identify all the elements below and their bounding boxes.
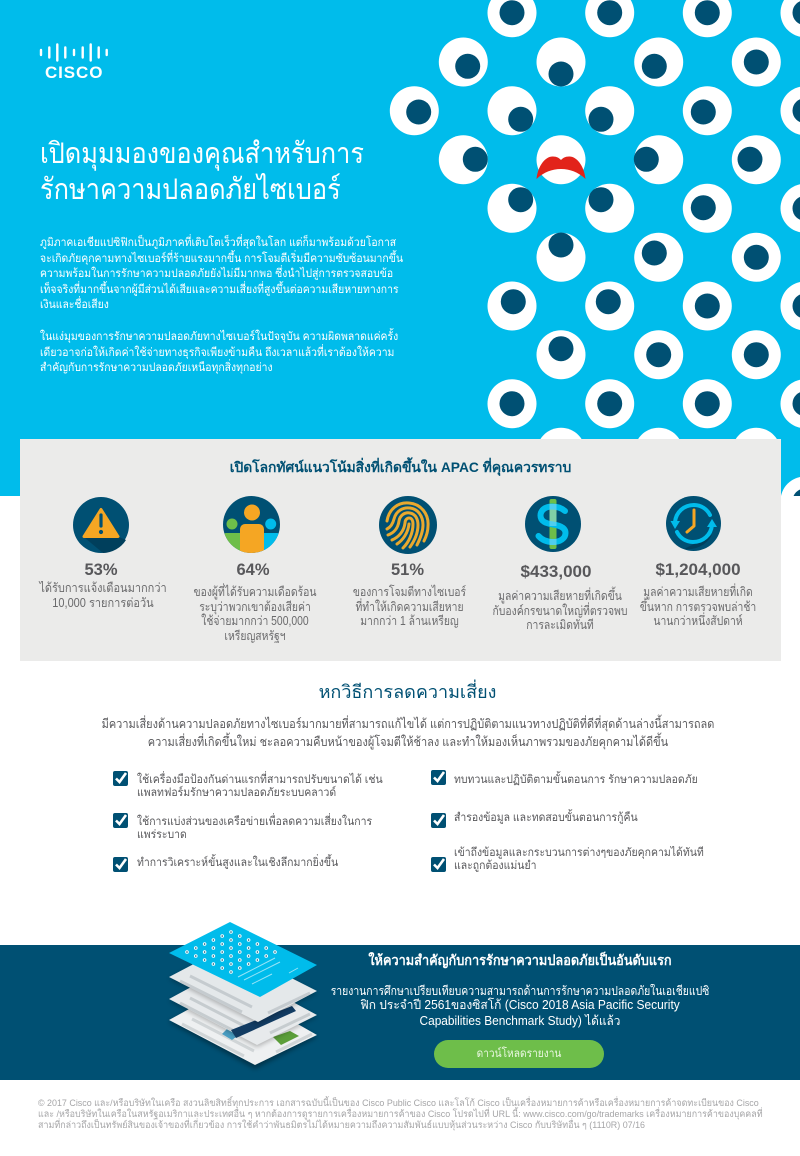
stat: $433,000: $433,000 (521, 562, 591, 581)
stat: 64%: เหรียญสหรัฐฯ (224, 628, 286, 642)
item 2: ใช้การแบ่งส่วนของเครือข่ายเพื่อลดความเสี่ยงในการ (137, 816, 372, 828)
logo: Cisco (40, 43, 108, 82)
title: รักษาความปลอดภัยไซเบอร์ (40, 174, 341, 206)
stat: 64%: ระบุว่าพวกเขาต้องเสียค่า (199, 600, 311, 614)
footer legal text: สามที่กล่าวถึงเป็นทรัพย์สินของเจ้าของที่เกี่ยวข้อง การใช้คำว่าพันธมิตรไม่ได้หมายความถึงความสัมพันธ์แบบหุ้นส่วนระหว่าง Cisco กับบริษัทอื่น ๆ (1110R) 07/16 (38, 1120, 645, 1131)
intro text paragraph 2 (40, 328, 398, 374)
stat: $1,204,000 (640, 560, 756, 628)
stat: 53%: 10,000 รายการต่อวัน (52, 596, 154, 610)
intro text paragraph 2: ในแง่มุมของการรักษาความปลอดภัยทางไซเบอร์ในปัจจุบัน ความผิดพลาดแค่ครั้ง (40, 331, 398, 343)
risk reduction intro: มีความเสี่ยงด้านความปลอดภัยทางไซเบอร์มากมายที่สามารถแก้ไขได้ แต่การปฏิบัติตามแนวทางปฏิบัติที่ดีที่สุดด้านล่างนี้สามารถลด (101, 717, 714, 731)
banner heading: ให้ความสำคัญกับการรักษาความปลอดภัยเป็นอันดับแรก (368, 952, 672, 968)
item 1: ใช้เครื่องมือป้องกันด่านแรกที่สามารถปรับขนาดได้ เช่น (137, 774, 383, 786)
stat: 51%: ที่ทำให้เกิดความเสียหาย (355, 600, 464, 614)
item 5 (431, 809, 638, 828)
intro text paragraph 2: เดียวอาจก่อให้เกิดค่าใช้จ่ายทางธุรกิจเพียงข้ามคืน ถึงเวลาแล้วที่เราต้องให้ความ (40, 347, 394, 359)
footer legal text (38, 1096, 763, 1131)
item 3: ทำการวิเคราะห์ขั้นสูงและในเชิงลึกมากยิ่งขึ้น (137, 857, 338, 869)
logo: Cisco: CISCO (45, 63, 103, 82)
stat: 53%: 53% (84, 561, 118, 579)
icon: fingerprint (379, 496, 437, 554)
blue hero background with eyes pattern (0, 0, 800, 496)
stat: 64% (193, 561, 316, 643)
title: เปิดมุมมองของคุณสำหรับการ (40, 138, 364, 170)
title (40, 138, 364, 206)
stat: 53% (38, 561, 167, 610)
intro text paragraph 1 (40, 234, 403, 311)
banner: download report (0, 945, 800, 1080)
icon: warning (73, 497, 129, 553)
icon: clock with arrows (666, 496, 721, 551)
stat: $433,000: มูลค่าความเสียหายที่เกิดขึ้น (498, 589, 622, 603)
intro text paragraph 1: ความพร้อมในการรักษาความปลอดภัยยังไม่มีมากพอ ซึ่งนำไปสู่การตรวจสอบข้อ (40, 268, 393, 280)
stat: 53%: ได้รับการแจ้งเตือนมากกว่า (39, 581, 167, 595)
button: download: ดาวน์โหลดรายงาน (477, 1048, 561, 1060)
icon: people (223, 496, 280, 553)
intro text paragraph 1: เท็จจริงที่มากขึ้นจากผู้มีส่วนได้เสียและความเสี่ยงที่สูงขึ้นต่อความเสียหายทางการ (40, 284, 399, 296)
icon: dollar (525, 496, 581, 552)
risk reduction intro (101, 714, 714, 750)
item 6 (431, 846, 704, 872)
checkbox list (113, 770, 704, 872)
banner text (331, 984, 709, 1028)
button: download (434, 1040, 604, 1068)
stat: $1,204,000: มูลค่าความเสียหายที่เกิด (643, 585, 753, 599)
item 2 (113, 813, 372, 840)
intro text paragraph 2: สำคัญกับการรักษาความปลอดภัยเหนือทุกสิ่งทุกอย่าง (40, 362, 273, 374)
item 1 (113, 771, 383, 798)
stat: $433,000: กับองค์กรขนาดใหญ่ที่ตรวจพบ (493, 604, 627, 618)
banner text: Capabilities Benchmark Study) ได้แล้ว (420, 1014, 620, 1028)
item 6: และถูกต้องแม่นยำ (454, 860, 536, 872)
stat: $1,204,000: นานกว่าหนึ่งสัปดาห์ (653, 614, 743, 628)
item 4 (431, 770, 698, 786)
stat: $1,204,000: $1,204,000 (655, 560, 741, 579)
stat: 51%: 51% (391, 561, 424, 579)
stat: $433,000 (493, 562, 627, 632)
stat: 64%: ใช้จ่ายมากกว่า 500,000 (201, 614, 309, 628)
stat: 51%: ของการโจมตีทางไซเบอร์ (353, 585, 466, 599)
item 1: แพลทฟอร์มรักษาความปลอดภัยระบบคลาวด์ (137, 786, 336, 798)
intro text paragraph 1: เงินและชื่อเสียง (40, 299, 109, 311)
banner text: รายงานการศึกษาเปรียบเทียบความสามารถด้านการรักษาความปลอดภัยในเอเชียแปซิ (331, 984, 709, 998)
stat: 51%: มากกว่า 1 ล้านเหรียญ (360, 614, 459, 628)
stat: 64%: 64% (236, 561, 270, 579)
risk reduction intro: ความเสี่ยงที่เกิดขึ้นใหม่ ชะลอความคืบหน้าของผู้โจมตีให้ช้าลง และทำให้มองเห็นภาพรวมของภัยคุกคามได้ดีขึ้น (147, 735, 668, 749)
panel: APAC stats (20, 439, 781, 661)
footer legal text: © 2017 Cisco และ/หรือบริษัทในเครือ สงวนลิขสิทธิ์ทุกประการ เอกสารฉบับนี้เป็นของ Cisco Public Cisco และโลโก้ Cisco เป็นเครื่องหมายการค้าหรือเครื่องหมายการค้าจดทะเบียนของ Cisco (38, 1098, 759, 1109)
illustration: report page stack (169, 922, 317, 1070)
banner text: ฟิก ประจำปี 2561ของซิสโก้ (Cisco 2018 Asia Pacific Security (360, 998, 680, 1012)
intro text paragraph 1: ภูมิภาคเอเชียแปซิฟิกเป็นภูมิภาคที่เติบโตเร็วที่สุดในโลก แต่ก็มาพร้อมด้วยโอกาส (40, 237, 396, 249)
item 3 (113, 854, 338, 872)
footer legal text: และ /หรือบริษัทในเครือในสหรัฐอเมริกาและประเทศอื่น ๆ หากต้องการดูรายการเครื่องหมายการค้าของ Cisco โปรดไปที่ URL นี้: www.cisco.com/go/trademarks เครื่องหมายการค้าของบุคคลที่ (38, 1109, 763, 1120)
item 6: เข้าถึงข้อมูลและกระบวนการต่างๆของภัยคุกคามได้ทันที (454, 847, 704, 859)
stat: 51% (353, 561, 466, 628)
item 5: สำรองข้อมูล และทดสอบขั้นตอนการกู้คืน (454, 812, 638, 824)
panel heading: เปิดโลกทัศน์แนวโน้มสิ่งที่เกิดขึ้นใน APAC ที่คุณควรทราบ (230, 460, 571, 475)
intro text paragraph 1: จะเกิดภัยคุกคามทางไซเบอร์ที่ร้ายแรงมากขึ้น การโจมตีเริ่มมีความซับซ้อนมากขึ้น (40, 253, 403, 265)
stat: $1,204,000: ขึ้นหาก การตรวจพบล่าช้า (640, 600, 756, 614)
stat: 64%: ของผู้ที่ได้รับความเดือดร้อน (193, 585, 316, 599)
stat: $433,000: การละเมิดทันที (526, 618, 594, 632)
item 4: ทบทวนและปฏิบัติตามขั้นตอนการ รักษาความปลอดภัย (454, 774, 698, 786)
heading: six ways: หกวิธีการลดความเสี่ยง (319, 682, 496, 702)
item 2: แพร่ระบาด (137, 828, 187, 840)
